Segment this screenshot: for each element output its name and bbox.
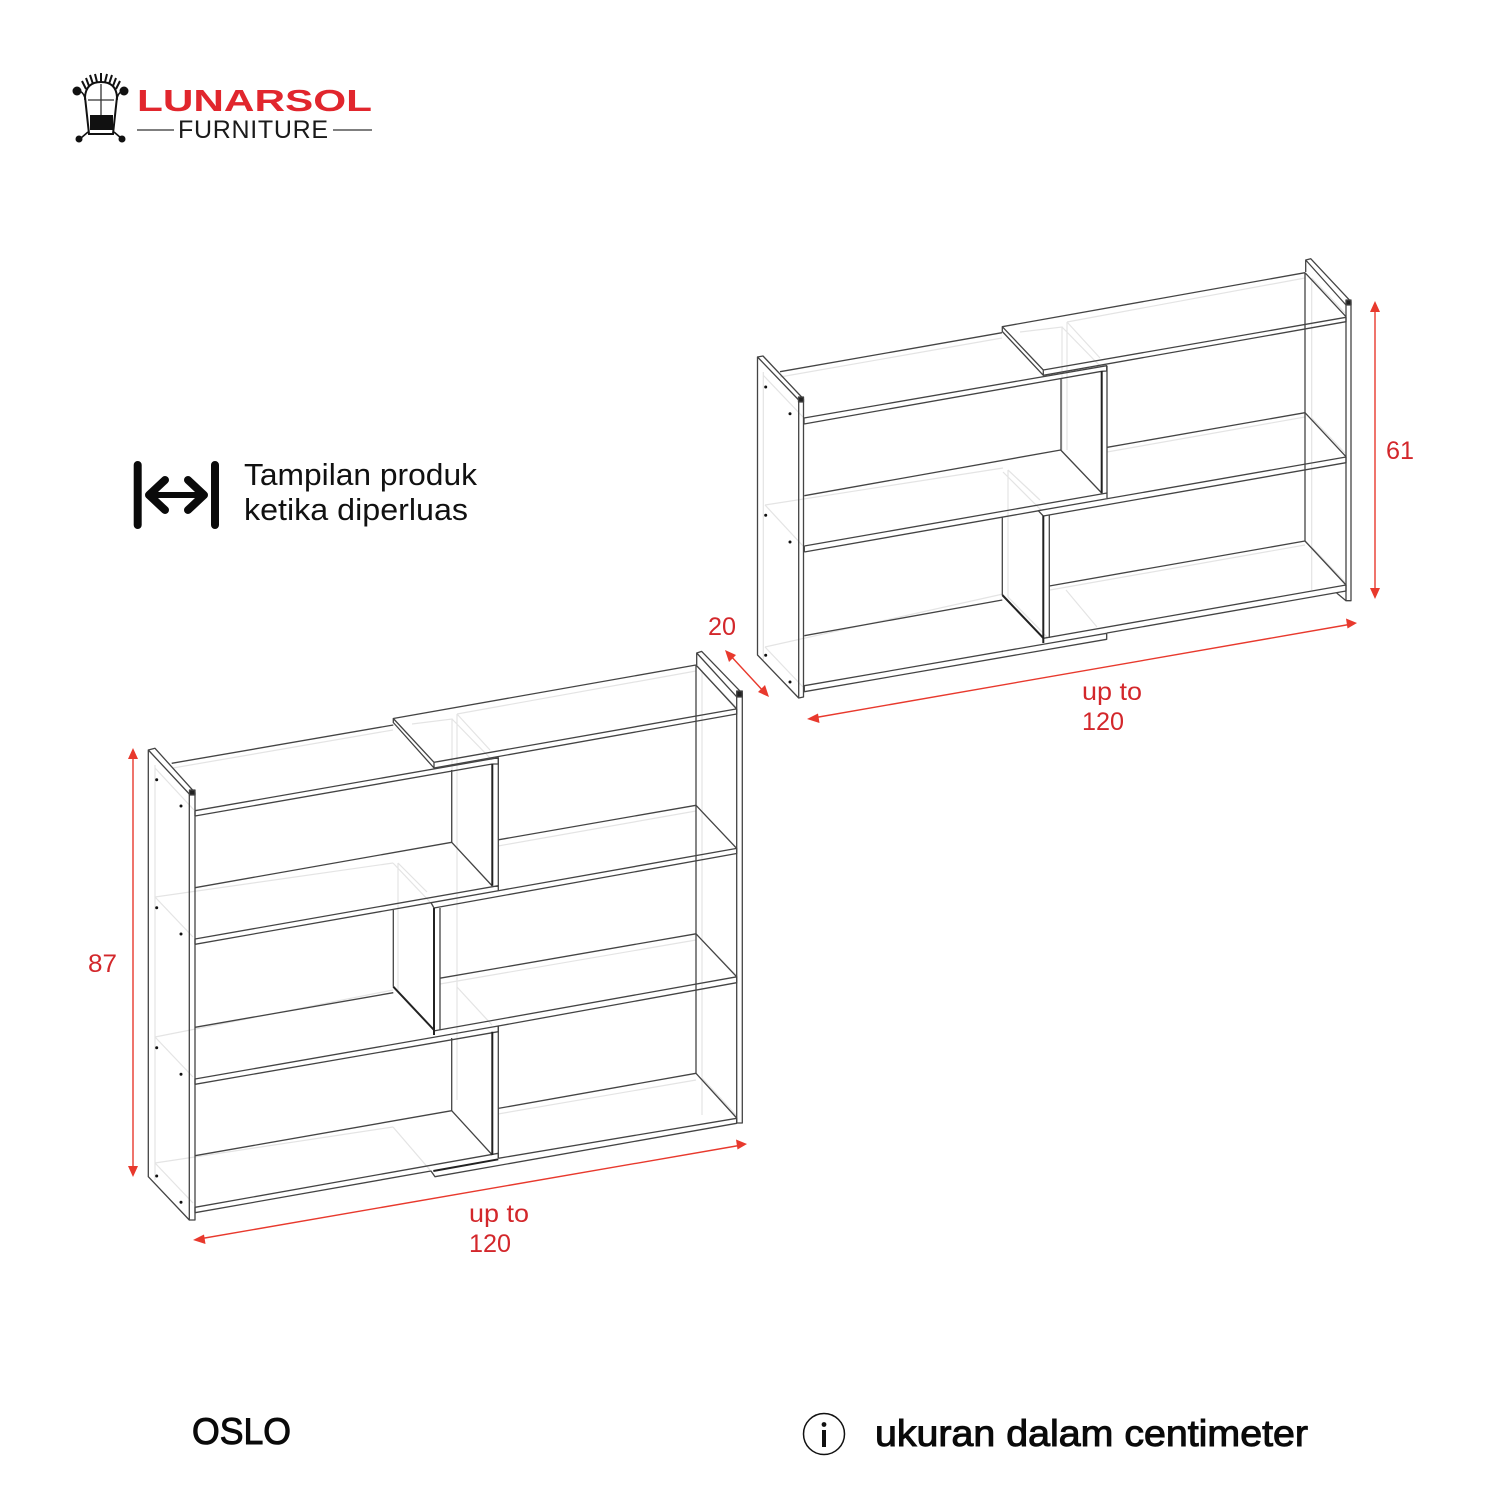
dimension: lower width up to 120: up to xyxy=(469,1200,529,1228)
dimension: upper width up to 120 xyxy=(807,618,1357,736)
icon: ornate window xyxy=(72,73,128,142)
dividers xyxy=(393,758,498,1158)
shelf drawing: closed, lower left xyxy=(148,651,742,1220)
dimension: lower width up to 120: 120 xyxy=(469,1230,511,1258)
note: size units: ukuran dalam centimeter xyxy=(875,1413,1308,1454)
left panel screw holes xyxy=(155,778,182,1204)
logo: Lunarsol Furniture xyxy=(72,73,372,144)
shelves xyxy=(780,273,1346,692)
dimension: lower height 87 xyxy=(88,748,138,1177)
left panel screw holes xyxy=(764,386,792,684)
product name: OSLO xyxy=(192,1411,291,1452)
dimension: upper width up to 120: up to xyxy=(1082,678,1142,706)
shelves xyxy=(172,665,737,1213)
left side panel xyxy=(758,356,804,698)
dividers xyxy=(1002,366,1107,643)
right side panel xyxy=(1305,259,1351,601)
right side panel xyxy=(696,651,742,1123)
logo subtitle: FURNITURE xyxy=(178,116,328,144)
text: expanded product view note: ketika diperluas xyxy=(244,492,468,527)
dimension: depth 20 xyxy=(708,613,769,697)
dimension: upper height 61: 61 xyxy=(1386,437,1414,465)
shelf drawing: expanded, upper right xyxy=(758,259,1351,698)
text: expanded product view note: Tampilan produk xyxy=(244,457,478,492)
dimension: depth 20: 20 xyxy=(708,613,736,641)
hidden construction lines xyxy=(155,670,736,1203)
hidden construction lines xyxy=(763,278,1345,687)
dimension: upper height 61 xyxy=(1370,301,1414,599)
logo wordmark: LUNARSOL xyxy=(137,83,372,118)
text: expanded product view note xyxy=(244,457,478,527)
dimension: lower width up to 120 xyxy=(193,1140,747,1258)
dimension: upper width up to 120: 120 xyxy=(1082,708,1124,736)
left side panel xyxy=(148,748,195,1220)
icon: expand arrows xyxy=(138,465,215,525)
icon: info xyxy=(804,1414,844,1454)
dimension: lower height 87: 87 xyxy=(88,950,117,978)
